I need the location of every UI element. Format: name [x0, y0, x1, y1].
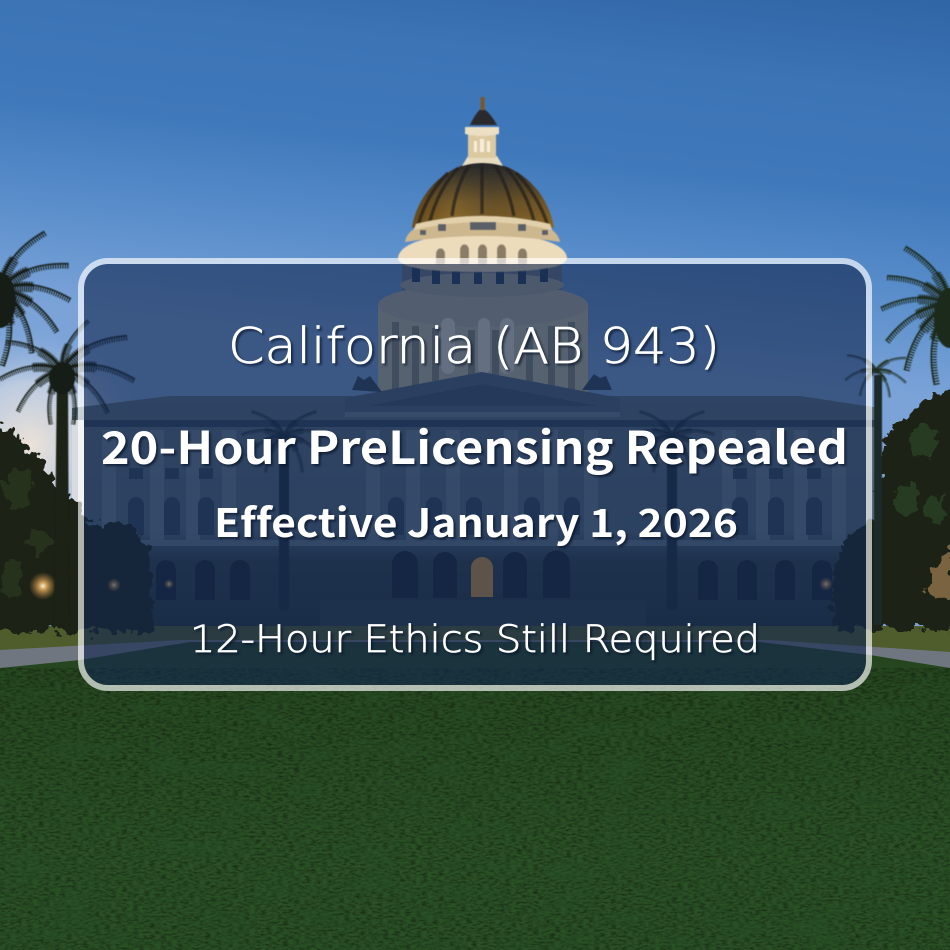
lit entrance door	[471, 557, 493, 597]
grass lawn	[0, 642, 950, 950]
subheading: Effective January 1, 2026: Effective January 1, 2026	[214, 493, 738, 549]
courtyard palms in front of building	[242, 406, 714, 610]
capitol building main block	[72, 396, 880, 640]
right palm trees	[844, 240, 950, 625]
heading: California (AB 943): California (AB 943)	[228, 318, 720, 375]
translucent navy panel	[81, 261, 869, 688]
panel border	[81, 261, 869, 688]
left trees	[0, 420, 152, 632]
left lamp	[29, 572, 57, 600]
lamps on facade	[107, 577, 833, 592]
capitol drum	[378, 258, 588, 402]
lawn strip and walkway	[0, 626, 950, 676]
capitol dome	[398, 162, 567, 272]
statues on pediment	[352, 374, 612, 392]
left palm trees	[0, 225, 134, 625]
panel fill	[84, 264, 866, 685]
right trees	[832, 390, 950, 630]
sky	[0, 0, 950, 680]
central pediment	[345, 372, 620, 417]
heading: 20-Hour PreLicensing Repealed: 20-Hour PreLicensing Repealed	[101, 412, 848, 477]
dome lantern and finial	[462, 97, 503, 166]
note: 12-Hour Ethics Still Required: 12-Hour Ethics Still Required	[190, 618, 760, 661]
